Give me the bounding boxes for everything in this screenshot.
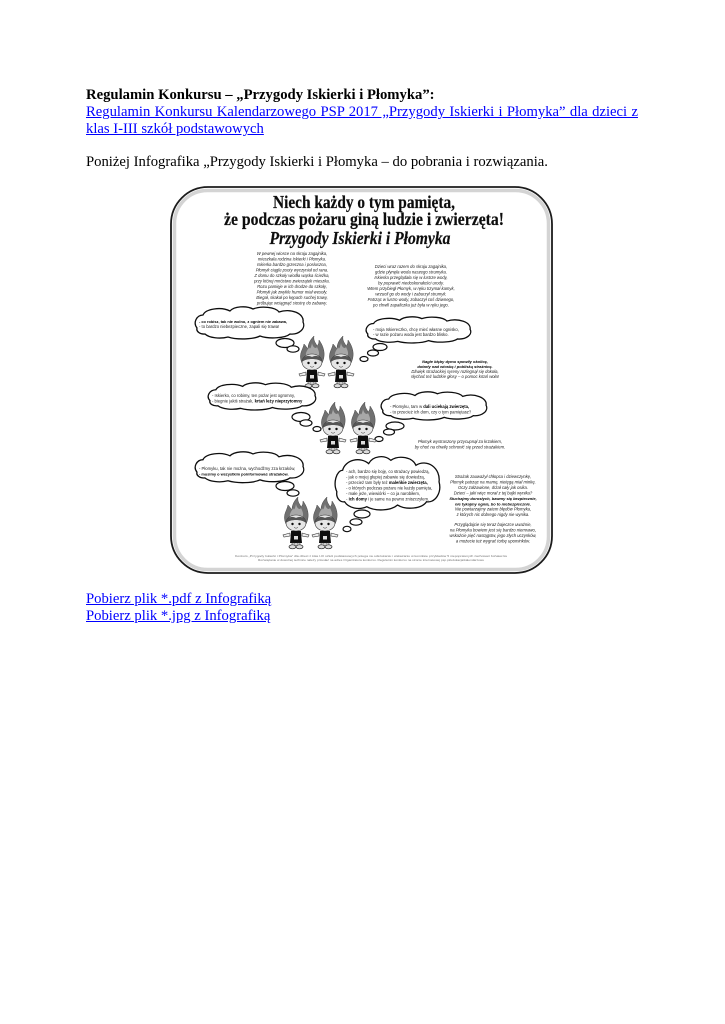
link: calendar contest rules	[86, 104, 638, 137]
footer: contest small print: Konkurs „Przygody Iskierki i Płomyka” dla dzieci z klas I-III szkół podstawowych polega na odszukaniu i wskazaniu w komiksie przykładów 5 niepoprawnych zachowań bohaterów	[235, 554, 508, 558]
narration: smoke over the street: dotarły nad wioskę i pobliską strażnicę.	[417, 364, 493, 369]
title	[224, 192, 504, 248]
poem: right stanza	[367, 264, 455, 308]
link: calendar contest rules: Regulamin Konkursu Kalendarzowego PSP 2017 „Przygody Iskierki i Płomyka” dla dzieci z	[86, 104, 638, 120]
characters: third pair	[283, 497, 338, 549]
characters: second pair	[320, 402, 376, 454]
thought cloud: Płomyk regrets: - przecież tam były też maleńkie zwierzęta,	[346, 480, 428, 485]
frame: rounded border	[171, 187, 552, 573]
thought cloud: Płomyk on animals: - to przecież ich dom, czy o tym pamiętasz?	[390, 410, 472, 414]
footer: contest small print: Rozwiązanie w dowolnej technice należy przesłać na adres Organizatora konkursu. Regulamin konkursu na stronie internetowej psp.pl/edukacja/kalendarzowe	[258, 558, 484, 562]
poem: left stanza: Biegał, skakał po kępach suchej trawy,	[256, 295, 328, 300]
narration: moral of the story: Strażak zauważył chłopca i dziewczynkę,	[455, 474, 531, 479]
narration: Płomyk crouches: Płomyk wystraszony przycupnął za krzakiem,	[418, 439, 502, 444]
poem: right stanza: by poprawić niedoskonałości urody.	[378, 280, 444, 286]
thought cloud: Płomyk replies: - moja Iskiereczko, chcę mieć własne ognisko,	[373, 327, 459, 332]
poem: left stanza: Z domu do szkoły wiodła wąska ścieżka,	[253, 273, 330, 278]
poem: right stanza: Dzieci wraz razem do skraju zagajnika,	[375, 264, 447, 269]
thought cloud: Iskierka warns: - co robisz, tak nie wolno, z ogniem nie zabawa,	[199, 319, 287, 324]
thought cloud: Iskierka asks: - Iskierko, co robimy, ten pożar jest ogromny,	[212, 393, 295, 398]
thought cloud: tell the firefighters: - musimy o wszystkim poinformować strażaków.	[199, 472, 289, 476]
thought cloud: Iskierka warns: - to bardzo niebezpieczne, zapali się trawa!	[199, 324, 279, 329]
poem: right stanza: Wtem przybiegł Płomyk, w ręku trzymał kamyk,	[367, 286, 455, 291]
thought cloud: Płomyk replies: - w razie pożaru woda jest bardzo blisko.	[373, 332, 449, 337]
thought cloud: tell the firefighters: - Płomyku, tak nie można, wychodźmy zza krzaków,	[199, 466, 295, 471]
poem: left stanza: przy której mnóstwo zwierzątek mieszka.	[253, 278, 330, 284]
narration: moral of the story: Płomyk patrząc na mamę, nietęgą miał minkę.	[450, 480, 536, 484]
thought cloud: Iskierka asks: - biegnie jakiś strażak, krtań leży nieprzytomny	[212, 398, 303, 404]
poem: right stanza: wrzucił go do wody i zaburzył strumyk.	[375, 292, 447, 296]
poem: left stanza	[253, 251, 330, 306]
narration: moral of the story: a możecie też wygrać torbę upominków.	[456, 538, 530, 544]
poem: left stanza: Płomyk jak zwykle humor miał wesoły.	[257, 290, 327, 294]
narration: moral of the story: wskażcie pięć nastągstw, jego złych uczynków,	[449, 533, 537, 538]
narration: moral of the story: Oczy załzawione, drżał cały jak osika.	[458, 485, 528, 490]
narration: smoke over the street: Nagle kłęby dymu spowiły okolicę,	[422, 359, 488, 364]
text: infographic intro: Poniżej Infografika „Przygody Iskierki i Płomyka – do pobrania i rozwiązania.	[86, 154, 548, 170]
narration: moral of the story: Dzieci – jaki więc morał z tej bajki wynika?	[454, 490, 533, 496]
narration: smoke over the street: Dźwięk strażackiej syreny rozlegnął się dokoła,	[411, 369, 499, 374]
thought cloud: Płomyk replies	[360, 317, 471, 362]
title: Przygody Iskierki i Płomyka	[269, 228, 451, 248]
poem: left stanza: Płomyk ciągle psoty wyczyniał od rana.	[256, 268, 328, 272]
narration: moral of the story: na Płomyka bowiem jest się bardzo niemrawo,	[450, 528, 536, 532]
thought cloud: Płomyk regrets	[335, 457, 440, 532]
poem: left stanza: Iskierka bardzo grzeczna i posłuszna,	[257, 262, 327, 267]
thought cloud: Płomyk on animals	[375, 392, 487, 442]
narration: moral of the story: nie tykajmy ognia, bo to niebezpiecznie.	[455, 502, 531, 506]
poem: left stanza: Rozu pamięje w ich drodze do szkoły,	[257, 284, 327, 289]
narration: Płomyk crouches: by choć na chwilę schronić się przed strażakiem.	[415, 444, 505, 450]
narration: moral of the story: Przyglądajcie się teraz bajeczce uważnie,	[454, 522, 532, 527]
thought cloud: tell the firefighters	[195, 452, 304, 496]
narration: moral of the story: Słuchajmy dorosłych, bawmy się bezpiecznie,	[449, 496, 537, 501]
narration: moral of the story: z których nic dobrego nigdy nie wynika.	[456, 512, 529, 517]
narration: moral of the story: Nie powtarzajmy zatem błędów Płomyka,	[455, 506, 531, 512]
footer: contest small print	[235, 554, 508, 562]
link: calendar contest rules: klas I-III szkół podstawowych	[86, 121, 264, 137]
heading: contest rules: Regulamin Konkursu – „Przygody Iskierki i Płomyka”:	[86, 87, 435, 103]
narration: smoke over the street: słychać też ludzkie głosy – o pomoc krtań woła!	[411, 374, 500, 379]
link: download pdf: Pobierz plik *.pdf z Infografiką	[86, 591, 271, 607]
characters: first pair	[299, 336, 354, 388]
title: że podczas pożaru giną ludzie i zwierzęta!	[224, 209, 504, 229]
thought cloud: Płomyk on animals: - Płomyku, tam w dali uciekają zwierzęta,	[390, 404, 469, 409]
thought cloud: Płomyk regrets: - jak o mojej głupiej zabawie się dowiedzą,	[346, 474, 425, 480]
title: Niech każdy o tym pamięta,	[273, 192, 455, 212]
poem: right stanza: gdzie płynęła woda naszego strumyka.	[375, 270, 447, 274]
thought cloud: Płomyk regrets: - małe jeże, wiewiórki – co ja narobiłem,	[346, 491, 420, 496]
thought cloud: Iskierka warns	[195, 307, 304, 352]
narration: moral of the story	[449, 474, 537, 544]
thought cloud: Płomyk regrets: - ach, bardzo się boję, co strażacy powiedzą,	[346, 469, 430, 474]
poem: left stanza: W pewnej wiosce na skraju zagajnika,	[257, 251, 327, 256]
poem: right stanza: po chwili zapaliczka już była w ręku jego.	[372, 302, 449, 308]
thought cloud: Iskierka asks	[208, 383, 321, 432]
poem: left stanza: próbując wciągnąć siostrę do zabawy.	[256, 300, 327, 306]
narration: smoke over the street	[411, 359, 500, 379]
thought cloud: Płomyk regrets: - ich domy i je same na pewno zniszczyłem.	[346, 496, 429, 502]
poem: right stanza: Patrząc w lustro wody, zobaczył coś dziwnego,	[368, 297, 454, 302]
poem: left stanza: mieszkała rodzina Iskierki i Płomyka.	[258, 256, 326, 262]
narration: Płomyk crouches	[415, 439, 505, 450]
thought cloud: Płomyk regrets: - o których podczas pożaru nie każdy pamięta,	[346, 486, 432, 490]
link: download jpg: Pobierz plik *.jpg z Infografiką	[86, 608, 270, 624]
poem: right stanza: Iskierka przeglądała się w lustrze wody,	[374, 275, 448, 280]
